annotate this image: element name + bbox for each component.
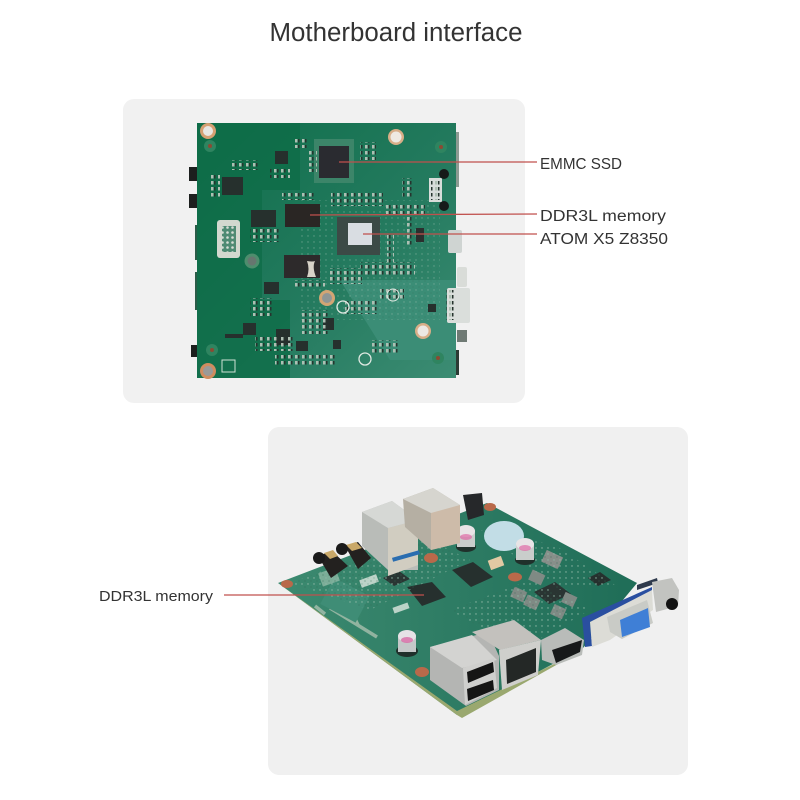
callout line: ATOM X5 Z8350 [363,233,537,235]
inductors [510,550,577,619]
callout line: EMMC SSD [339,161,537,163]
chips [407,582,446,606]
rear USB stacks [362,488,460,576]
VGA pad, top view [217,220,240,258]
HDMI area [448,230,462,253]
white round marker [337,301,349,313]
mounting holes [200,123,447,379]
small ICs [222,151,436,351]
label: EMMC SSD: EMMC SSD [540,156,622,173]
VGA connector [582,578,658,647]
panel: angled view [268,427,688,775]
DC jack [652,578,679,612]
motherboard angled view [278,488,679,718]
label: DDR3L memory: DDR3L memory [540,208,666,225]
small parts texture [290,535,470,610]
silkscreen recycle mark [222,360,235,372]
coin battery pad [484,521,524,551]
VGA connector pins [446,267,470,323]
ethernet port [472,620,541,690]
motherboard top view [189,123,470,379]
memory chips [285,204,320,227]
capacitors [396,525,535,657]
label: lower DDR3L memory: DDR3L memory [99,588,214,605]
HDMI port [541,628,584,665]
title: Motherboard interface [270,19,522,47]
power jack, rear [463,493,484,520]
pale connector strips [315,606,377,637]
board [278,503,637,715]
board [197,123,456,378]
eMMC chip [314,139,354,183]
callout line: lower DDR3L memory [224,594,424,596]
left darker region [197,123,300,378]
panel: top view [123,99,525,403]
side connectors [189,132,467,375]
SMD component clusters [210,138,425,365]
front USB port [430,632,499,706]
copper mounting holes [281,503,522,677]
lower right lighter region [340,280,456,360]
label: ATOM X5 Z8350: ATOM X5 Z8350 [540,231,668,248]
processor [337,217,380,255]
pin header [429,178,442,202]
audio jacks [313,542,371,578]
callout line: DDR3L memory [310,214,537,215]
white connector [488,556,504,570]
